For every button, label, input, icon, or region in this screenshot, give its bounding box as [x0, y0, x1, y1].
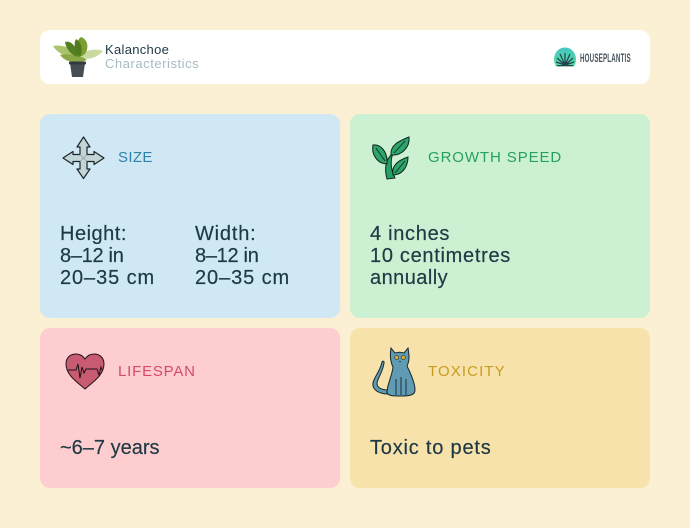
- subtitle: Characteristics: [105, 56, 199, 71]
- icon: heart with pulse: [66, 354, 104, 390]
- height values: Height:: [60, 223, 127, 245]
- width values: 20–35 cm: [195, 267, 290, 289]
- width values: [195, 223, 290, 289]
- plant name: Kalanchoe: [105, 42, 169, 57]
- width values: 8–12 in: [195, 245, 259, 267]
- icon: leafy sprout: [372, 136, 410, 180]
- lifespan value: ~6–7 years: [60, 437, 160, 459]
- height values: 8–12 in: [60, 245, 124, 267]
- icon: houseplantis logo: [554, 48, 576, 66]
- panel: growth speed: [350, 114, 650, 318]
- heading: lifespan: LIFESPAN: [118, 363, 196, 380]
- panel: lifespan: [40, 328, 340, 488]
- brand name: HOUSEPLANTIS: [580, 51, 631, 65]
- growth values: annually: [370, 267, 448, 289]
- header bar: [40, 30, 650, 84]
- heading: size: SIZE: [118, 149, 153, 166]
- height values: 20–35 cm: [60, 267, 155, 289]
- panel: size: [40, 114, 340, 318]
- panel: toxicity: [350, 328, 650, 488]
- heading: toxicity: TOXICITY: [428, 363, 506, 380]
- height values: [60, 223, 155, 289]
- icon: four-way arrows: [62, 136, 105, 180]
- toxicity value: Toxic to pets: [370, 437, 492, 459]
- icon: blue cat: [372, 347, 416, 396]
- growth values: 10 centimetres: [370, 245, 511, 267]
- heading: growth speed: GROWTH SPEED: [428, 149, 562, 166]
- growth values: [370, 223, 511, 289]
- width values: Width:: [195, 223, 256, 245]
- growth values: 4 inches: [370, 223, 450, 245]
- icon: potted kalanchoe plant: [53, 37, 103, 77]
